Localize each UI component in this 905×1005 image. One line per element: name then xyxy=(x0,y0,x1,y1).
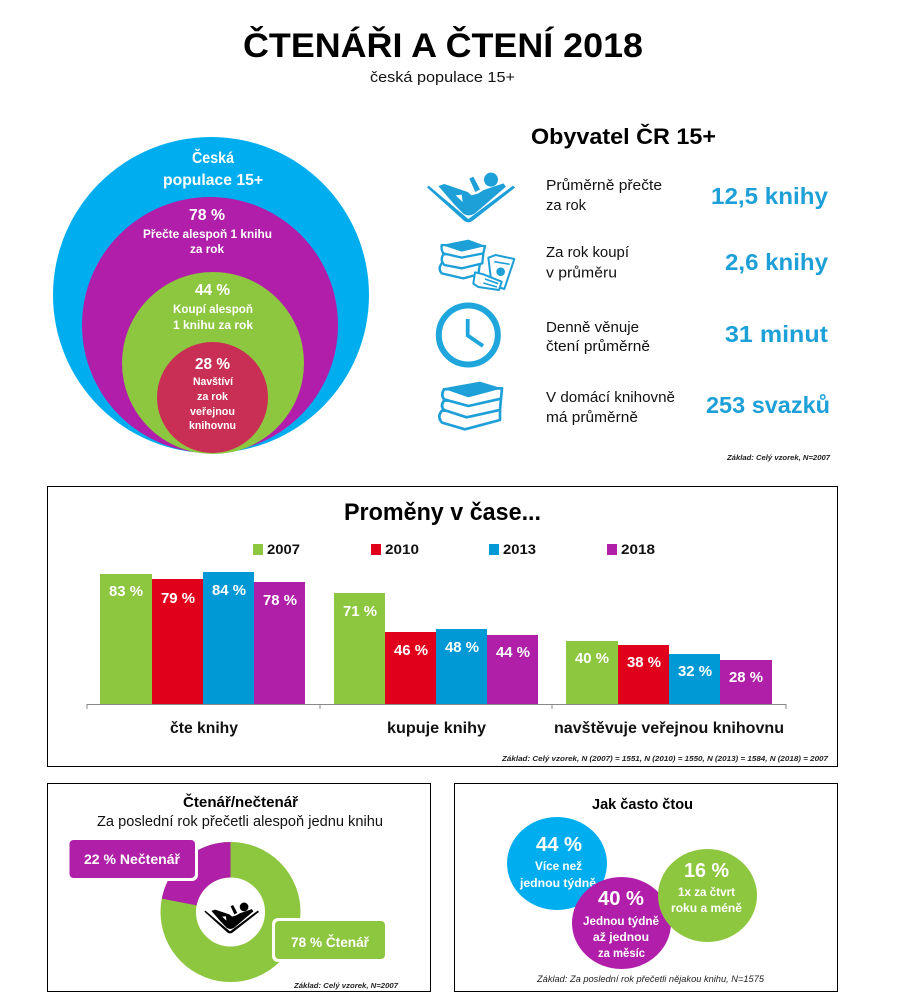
legend: 2010 xyxy=(385,541,419,557)
donut chart xyxy=(162,842,283,964)
circle: Czech population: Česká xyxy=(192,148,234,167)
value: books read: 12,5 knihy xyxy=(711,183,828,209)
text: daily reading time: Denně věnuje xyxy=(546,319,639,336)
heading: Čtenář/nečtenář xyxy=(183,793,298,811)
icon: clock xyxy=(439,306,498,364)
callout: reader: 78 % Čtenář xyxy=(291,933,370,950)
bubble: quarterly or less xyxy=(658,849,757,942)
text: average reads per year: za rok xyxy=(546,197,586,214)
bubble: quarterly or less: roku a méně xyxy=(671,901,742,915)
footnote: Základ: Celý vzorek, N=2007 xyxy=(293,983,399,990)
legend: 2013 xyxy=(503,541,536,557)
bars: reads books: 83 % xyxy=(109,584,143,600)
circle: visits public library: 28 % xyxy=(195,356,230,373)
circle: Czech population xyxy=(53,137,369,453)
circle: buys at least one book: Koupí alespoň xyxy=(173,302,253,316)
circle: buys at least one book xyxy=(122,272,304,454)
icon: reader in chevron xyxy=(427,173,515,222)
circle: visits public library: veřejnou xyxy=(190,406,235,418)
callout: non-reader: 22 % Nečtenář xyxy=(84,851,181,867)
bars: visits public library: 40 % xyxy=(575,651,609,667)
axis labels: navštěvuje veřejnou knihovnu xyxy=(554,720,784,737)
bars: visits public library: 28 % xyxy=(729,670,763,686)
bubble: more than once a week xyxy=(507,817,607,910)
text: average reads per year xyxy=(546,177,662,214)
text: home library xyxy=(546,389,675,426)
value: books bought: 2,6 knihy xyxy=(725,249,828,275)
circle: reads at least one book xyxy=(82,197,338,453)
bubble: weekly to monthly: 40 % xyxy=(598,888,644,910)
axis labels: čte knihy xyxy=(170,720,238,737)
text: home library: má průměrně xyxy=(546,409,638,426)
heading: population 15+: Obyvatel ČR 15+ xyxy=(531,124,716,149)
bubble: weekly to monthly: Jednou týdně xyxy=(583,914,659,928)
circle: reads at least one book: Přečte alespoň 1 knihu xyxy=(143,227,272,241)
bars: reads books: 79 % xyxy=(161,591,195,607)
circle: reads at least one book: 78 % xyxy=(189,207,225,224)
circle: visits public library xyxy=(157,342,268,453)
icon: stack of books xyxy=(439,382,502,429)
bars: visits public library: 32 % xyxy=(678,664,712,680)
circle: visits public library: Navštíví xyxy=(193,376,234,388)
axis labels: kupuje knihy xyxy=(387,720,486,737)
bubble: weekly to monthly: za měsíc xyxy=(598,946,645,960)
text: buys per year xyxy=(546,244,630,282)
bubble: weekly to monthly: až jednou xyxy=(593,930,649,944)
bars: reads books xyxy=(100,572,305,704)
text: daily reading time: čtení průměrně xyxy=(546,338,650,355)
heading: Proměny v čase... xyxy=(344,499,541,526)
icon: black reader xyxy=(204,903,259,933)
bubble: quarterly or less: 16 % xyxy=(684,860,729,882)
text: home library: V domácí knihovně xyxy=(546,389,675,406)
legend: 2018 xyxy=(621,541,655,557)
bars: buys books: 44 % xyxy=(496,645,530,661)
legend xyxy=(253,541,655,557)
footnote: base: Základ: Celý vzorek, N=2007 xyxy=(726,455,831,462)
panel: reader / non-reader xyxy=(48,784,430,992)
circle: buys at least one book: 44 % xyxy=(195,282,230,299)
panel: changes over time xyxy=(48,486,838,766)
bars: visits public library xyxy=(566,641,772,704)
footnote: Základ: Celý vzorek, N (2007) = 1551, N (2010) = 1550, N (2013) = 1584, N (2018) = 2007 xyxy=(501,756,829,763)
bars: buys books: 71 % xyxy=(343,604,377,620)
text: average reads per year: Průměrně přečte xyxy=(546,177,662,194)
value: volumes: 253 svazků xyxy=(706,392,830,418)
text: daily reading time xyxy=(546,319,650,355)
circle: visits public library: knihovnu xyxy=(189,420,236,432)
bars: buys books xyxy=(334,593,538,704)
callout: reader xyxy=(272,918,388,962)
bars: reads books: 78 % xyxy=(263,593,297,609)
nested circles diagram xyxy=(53,137,369,454)
bubble: more than once a week: Více než xyxy=(535,859,582,873)
bubble: more than once a week: 44 % xyxy=(536,834,582,856)
legend: 2007 xyxy=(267,541,300,557)
bubble: more than once a week: jednou týdně xyxy=(519,876,596,890)
bars: buys books: 46 % xyxy=(394,643,428,659)
heading: Jak často čtou xyxy=(592,796,693,813)
circle: buys at least one book: 1 knihu za rok xyxy=(173,318,253,332)
circle: Czech population: populace 15+ xyxy=(163,172,263,189)
text: buys per year: Za rok koupí xyxy=(546,244,630,261)
footnote: Základ: Za poslední rok přečetli nějakou knihu, N=1575 xyxy=(536,974,765,985)
callout: non-reader xyxy=(66,837,198,881)
title: ČTENÁŘI A ČTENÍ 2018 xyxy=(243,26,643,65)
bubble: quarterly or less: 1x za čtvrt xyxy=(678,885,735,899)
panel: how often they read xyxy=(454,784,838,992)
subtitle: česká populace 15+ xyxy=(370,69,515,86)
bars: buys books: 48 % xyxy=(445,640,479,656)
bar chart xyxy=(87,572,786,737)
subheading: Za poslední rok přečetli alespoň jednu knihu xyxy=(97,814,383,830)
icon: books and money xyxy=(440,240,514,290)
bars: visits public library: 38 % xyxy=(627,655,661,671)
circle: reads at least one book: za rok xyxy=(190,242,224,256)
axis labels xyxy=(170,720,784,737)
value: minutes: 31 minut xyxy=(725,321,828,347)
bubble: weekly to monthly xyxy=(572,877,671,969)
circle: visits public library: za rok xyxy=(197,391,229,403)
text: buys per year: v průměru xyxy=(546,264,617,282)
bars: reads books: 84 % xyxy=(212,583,246,599)
